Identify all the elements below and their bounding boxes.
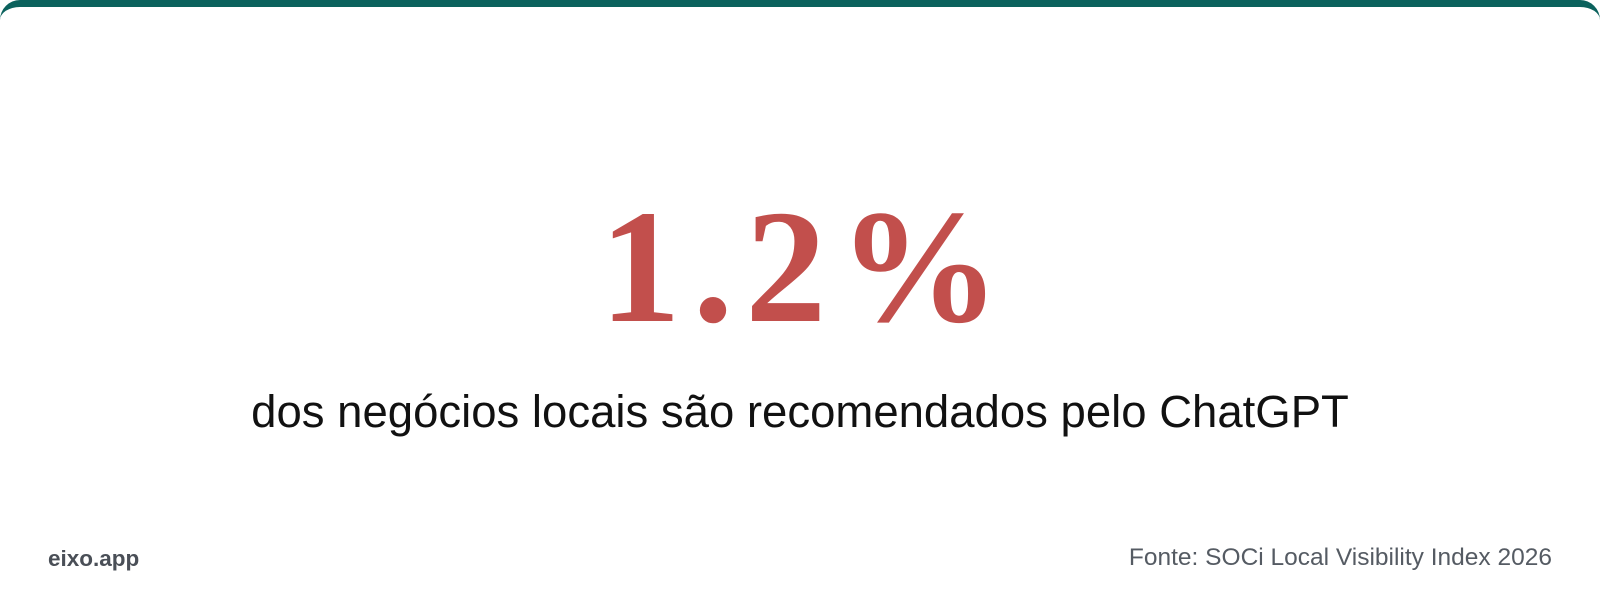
big number: 1.2% — [600, 178, 1012, 357]
source: Fonte: SOCi Local Visibility Index 2026 — [1129, 544, 1552, 571]
subtitle: dos negócios locais são recomendados pelo ChatGPT — [251, 386, 1349, 437]
brand: eixo.app — [48, 546, 139, 571]
